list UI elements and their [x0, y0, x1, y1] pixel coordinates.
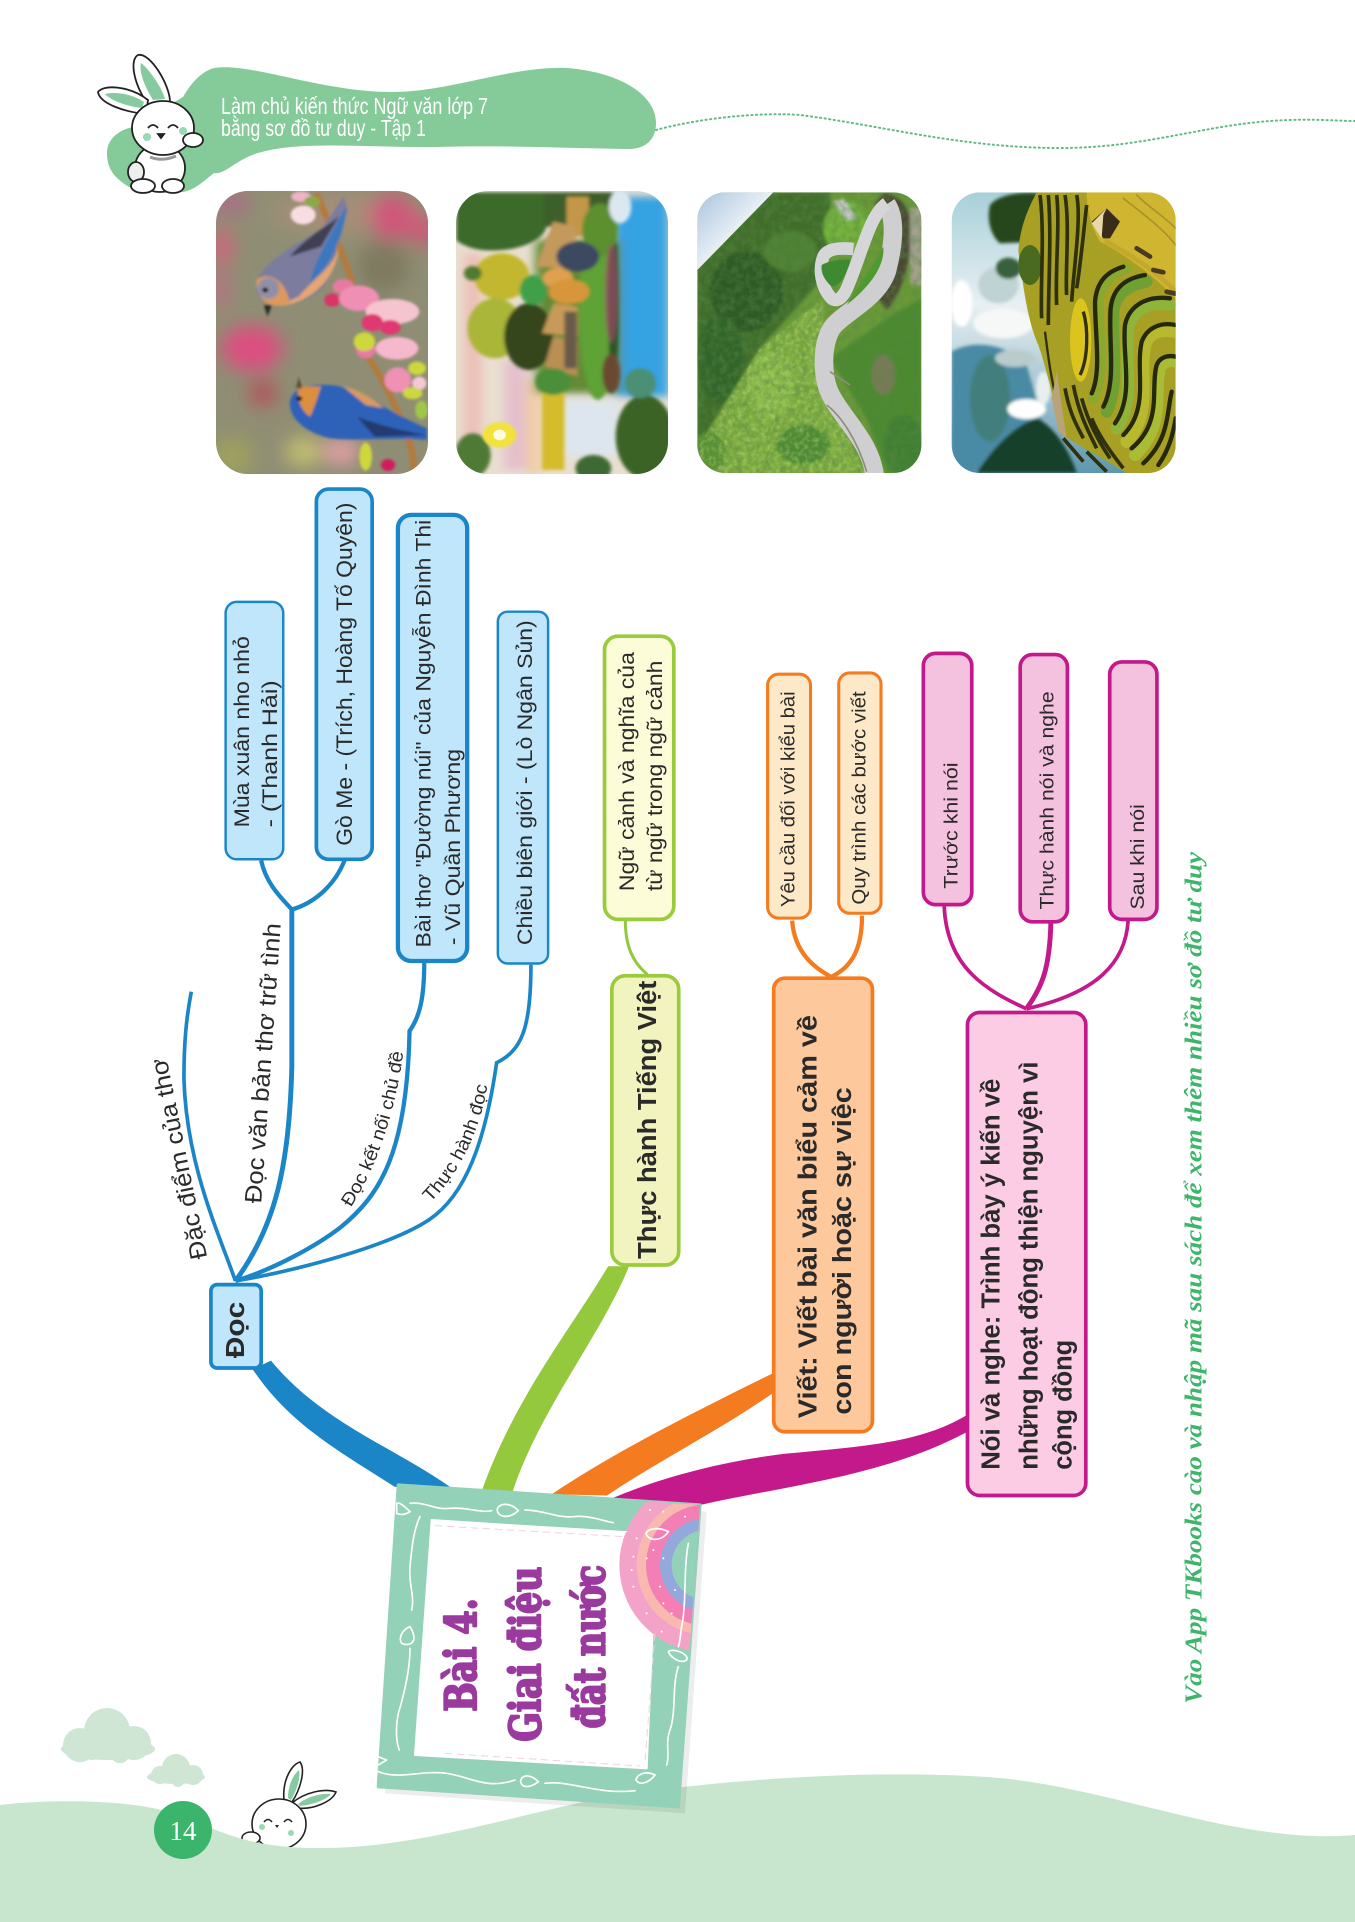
node: Trước khi nói: Trước khi nói [941, 762, 963, 889]
node: Trước khi nói [923, 653, 972, 905]
node: Nói và nghe: cộng đồng [1050, 1340, 1078, 1470]
node: Mùa xuân nho nhỏ: - (Thanh Hải) [258, 680, 282, 827]
node: Chiều biên giới [498, 612, 548, 963]
clouds [61, 1708, 205, 1787]
node: Viết: con người hoặc sự việc [829, 1087, 857, 1415]
header title [221, 93, 488, 141]
photo: birds on blossom branch [216, 191, 428, 474]
branch: Đọc ribbon [253, 1361, 450, 1487]
branch label: Đặc điểm của thơ: Đặc điểm của thơ [146, 1056, 213, 1262]
node: Viết: Viết: Viết bài văn biểu cảm về [795, 1015, 823, 1418]
card title: Bài 4. [436, 1598, 487, 1712]
node: Yêu cầu đối với kiểu bài [768, 674, 811, 918]
node: Mùa xuân nho nhỏ: Mùa xuân nho nhỏ [230, 636, 254, 827]
node: Thực hành nói và nghe [1020, 655, 1067, 922]
node: Nói và nghe: những hoạt động thiện nguyện vì [1015, 1062, 1043, 1470]
node: Ngữ cảnh và nghĩa: Ngữ cảnh và nghĩa của [615, 652, 639, 891]
branch label: Thực hành đọc: Thực hành đọc [422, 1084, 488, 1199]
bottom bunny mascot [242, 1762, 336, 1849]
node: Quy trình các bước viết: Quy trình các bước viết [850, 691, 871, 905]
branch label: Đọc văn bản thơ trữ tình: Đọc văn bản thơ trữ tình [240, 922, 287, 1204]
node: Thực hành nói và nghe: Thực hành nói và nghe [1036, 691, 1058, 910]
header title: Làm chủ kiến thức Ngữ văn lớp 7 [221, 93, 488, 119]
node: Bài thơ Đường núi [398, 515, 467, 961]
mind map diagram [146, 487, 1208, 1736]
vertical green note: Vào App TKbooks cào và nhập mã sau sách để xem thêm nhiều sơ đồ tư duy [1181, 852, 1208, 1704]
page background hill [0, 1762, 1355, 1922]
card title: đất nước [564, 1565, 615, 1728]
node: Nói và nghe [967, 1013, 1086, 1495]
node: Mùa xuân nho nhỏ [226, 602, 283, 859]
node: Sau khi nói [1110, 662, 1157, 919]
doodle frame [378, 1503, 688, 1791]
node: Đọc: Đọc [222, 1302, 250, 1358]
node: Thực hành Tiếng Việt [612, 976, 679, 1265]
top bunny mascot [98, 55, 203, 193]
connector: Tiếng Việt sub-branch [625, 921, 647, 975]
card title [436, 1565, 615, 1742]
page number [154, 1801, 212, 1859]
branch label: Đọc kết nối chủ đề: Đọc kết nối chủ đề [340, 1052, 403, 1206]
branch: Nói và nghe ribbon [613, 1415, 967, 1505]
node: Gò Me: Gò Me - (Trích, Hoàng Tố Quyên) [332, 503, 357, 846]
lesson title card [376, 1483, 706, 1814]
node: Sau khi nói: Sau khi nói [1127, 804, 1149, 910]
rainbow [619, 1502, 700, 1650]
photo: winding mountain road [693, 192, 923, 478]
connectors: Viết sub-branches [792, 916, 862, 977]
connectors: Đọc sub-branches [184, 861, 531, 1281]
node: Chiều biên giới: Chiều biên giới - (Lò Ngân Sủn) [513, 620, 537, 945]
hill [0, 1774, 1355, 1922]
dotted line [656, 114, 1355, 148]
header banner [107, 67, 656, 192]
card title: Giai điệu [501, 1567, 552, 1742]
node: Quy trình các bước viết [839, 673, 881, 913]
page number: 14 [170, 1816, 197, 1846]
node: Ngữ cảnh và nghĩa [605, 636, 674, 919]
branch: Viết ribbon [552, 1373, 774, 1495]
branch: Thực hành Tiếng Việt ribbon [482, 1266, 629, 1492]
photo: village painting [451, 187, 674, 482]
node: Thực hành Tiếng Việt: Thực hành Tiếng Việt [634, 980, 662, 1259]
node: Yêu cầu đối với kiểu bài: Yêu cầu đối với kiểu bài [779, 691, 800, 907]
node: Bài thơ Đường núi: Bài thơ "Đường núi" của Nguyễn Đình Thi [410, 520, 435, 948]
photo: rice terraces [951, 192, 1176, 473]
node: Nói và nghe: Nói và nghe: Trình bày ý kiến về [977, 1079, 1005, 1470]
node: Gò Me [316, 489, 372, 859]
node: Bài thơ Đường núi: - Vũ Quần Phương [441, 749, 465, 945]
connectors: Nói và nghe sub-branches [944, 906, 1128, 1009]
header title: bằng sơ đồ tư duy - Tập 1 [221, 115, 426, 141]
node: Viết [774, 978, 872, 1432]
node: Ngữ cảnh và nghĩa: từ ngữ trong ngữ cảnh [643, 661, 667, 891]
node: Đọc [211, 1285, 261, 1368]
